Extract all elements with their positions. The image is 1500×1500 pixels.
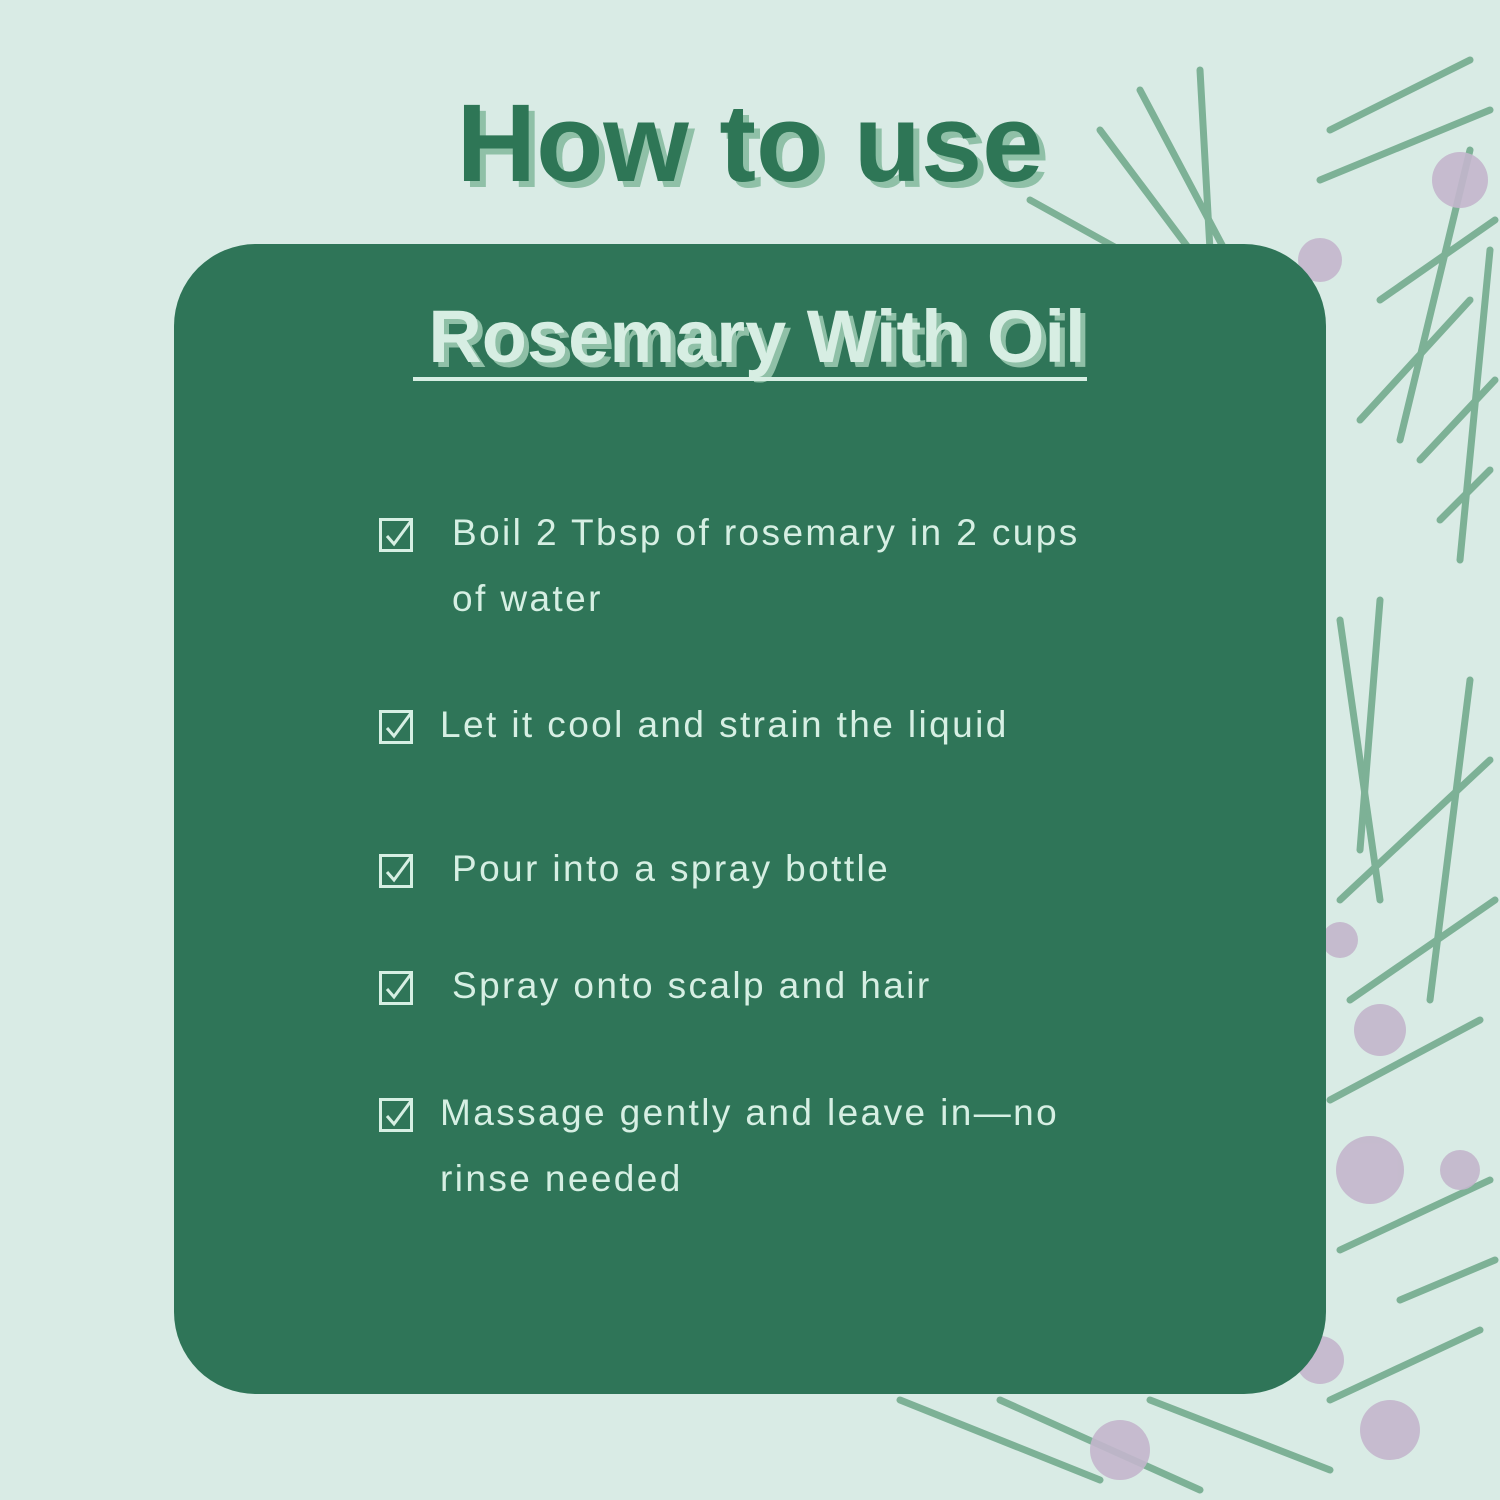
- icon: checkbox: [379, 518, 413, 552]
- item 1: of water: [452, 578, 603, 619]
- item 1: [379, 512, 1080, 619]
- item 4: Spray onto scalp and hair: [452, 965, 932, 1006]
- panel: instructions card: [174, 244, 1326, 1394]
- subtitle: Rosemary With Oil: [428, 295, 1086, 378]
- icon: checkbox: [379, 971, 413, 1005]
- icon: checkbox: [379, 1098, 413, 1132]
- item 5: Massage gently and leave in—no: [440, 1092, 1059, 1133]
- item 5: rinse needed: [440, 1158, 683, 1199]
- icon: checkbox: [379, 710, 413, 744]
- item 1: Boil 2 Tbsp of rosemary in 2 cups: [452, 512, 1080, 553]
- subtitle underline: [413, 377, 1087, 381]
- icon: checkbox: [379, 854, 413, 888]
- item 2: Let it cool and strain the liquid: [440, 704, 1009, 745]
- title: How to use: [457, 82, 1043, 205]
- item 3: Pour into a spray bottle: [452, 848, 890, 889]
- item 5: [379, 1092, 1059, 1199]
